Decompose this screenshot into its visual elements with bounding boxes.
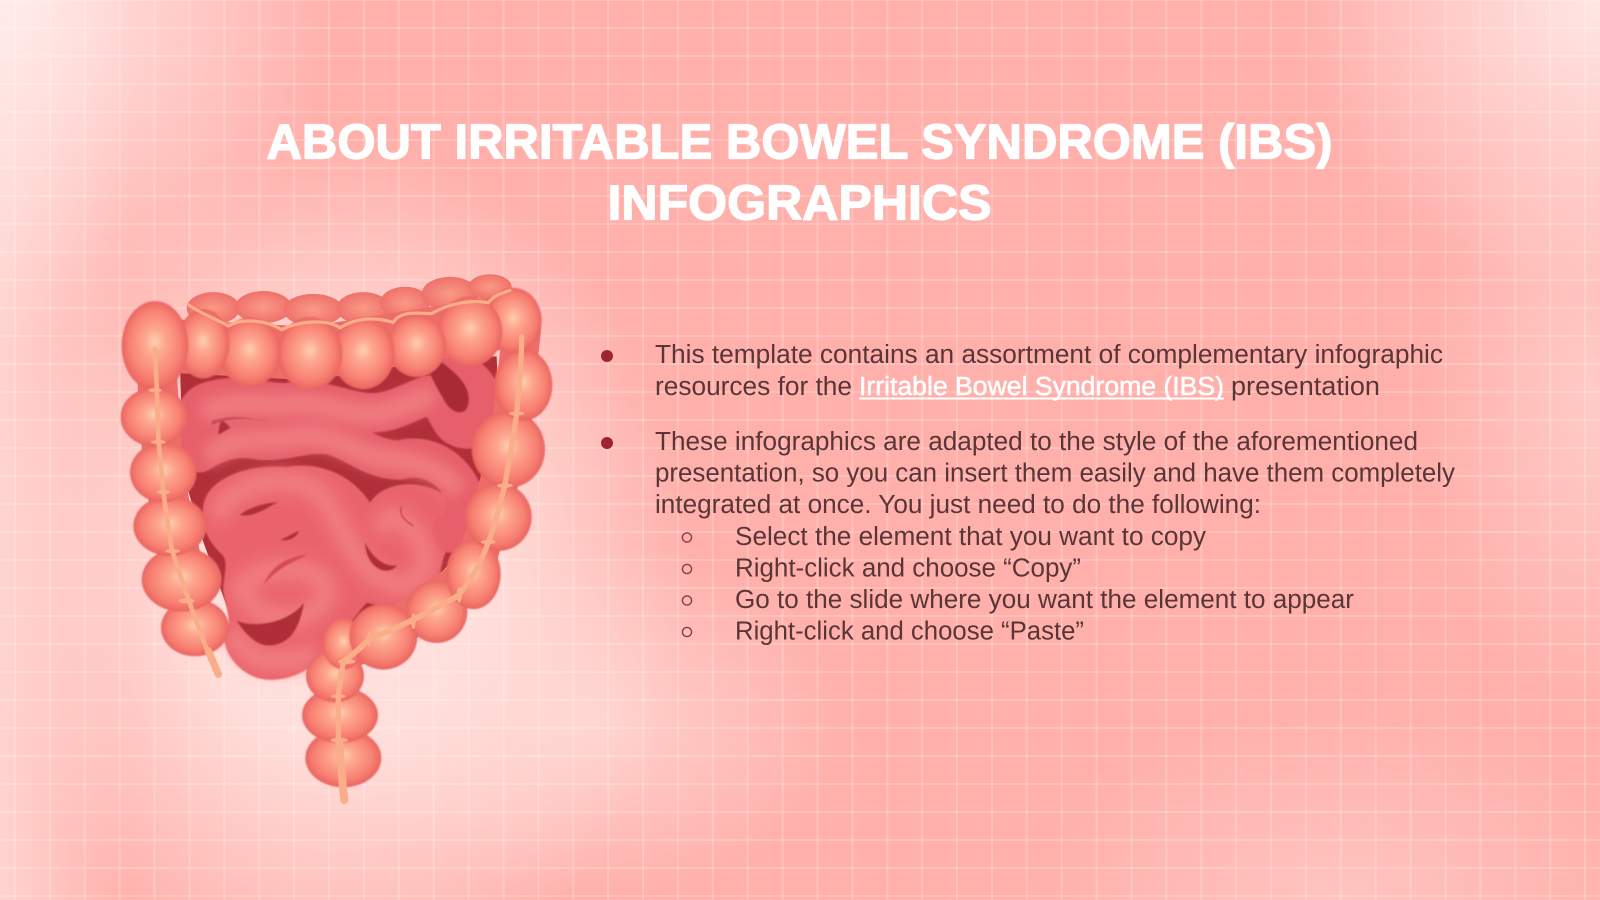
ascending colon: [121, 388, 229, 656]
cavity behind small intestine: [180, 356, 500, 638]
second bullet: presentation, so you can insert them easily and have them completely: [655, 460, 1455, 488]
transverse colon: [122, 288, 542, 390]
second bullet: [601, 428, 1455, 519]
title: ABOUT IRRITABLE BOWEL SYNDROME (IBS): [266, 116, 1332, 170]
dark folds: [218, 421, 397, 646]
colon bands: [155, 290, 522, 800]
descending colon: [323, 349, 552, 669]
sub-list steps: Right-click and choose “Copy”: [735, 554, 1081, 582]
colon segments: [121, 288, 552, 787]
sub-list steps: Go to the slide where you want the element to appear: [735, 586, 1355, 614]
second bullet: integrated at once. You just need to do the following:: [655, 491, 1261, 519]
first bullet: [601, 341, 1443, 401]
title: INFOGRAPHICS: [608, 176, 992, 230]
first bullet: presentation: [1231, 373, 1380, 401]
illustration: intestines: [121, 274, 552, 800]
sub-list steps: Select the element that you want to copy: [735, 523, 1206, 551]
title: [266, 116, 1332, 230]
bullet list: [601, 341, 1455, 646]
rectum: [302, 649, 381, 787]
band joints: [148, 388, 525, 743]
first bullet: resources for the: [655, 373, 852, 401]
first bullet: Irritable Bowel Syndrome (IBS): [859, 373, 1224, 401]
sub-list steps: [682, 523, 1355, 646]
top dark hollow: [428, 362, 469, 412]
second bullet: These infographics are adapted to the style of the aforementioned: [655, 428, 1418, 456]
small intestine: [193, 362, 484, 680]
colon upper back bumps: [187, 274, 512, 326]
sub-list steps: Right-click and choose “Paste”: [735, 618, 1084, 646]
colon backing silhouette: [155, 321, 522, 760]
first bullet: This template contains an assortment of complementary infographic: [655, 341, 1443, 369]
tube highlights: [210, 397, 453, 661]
